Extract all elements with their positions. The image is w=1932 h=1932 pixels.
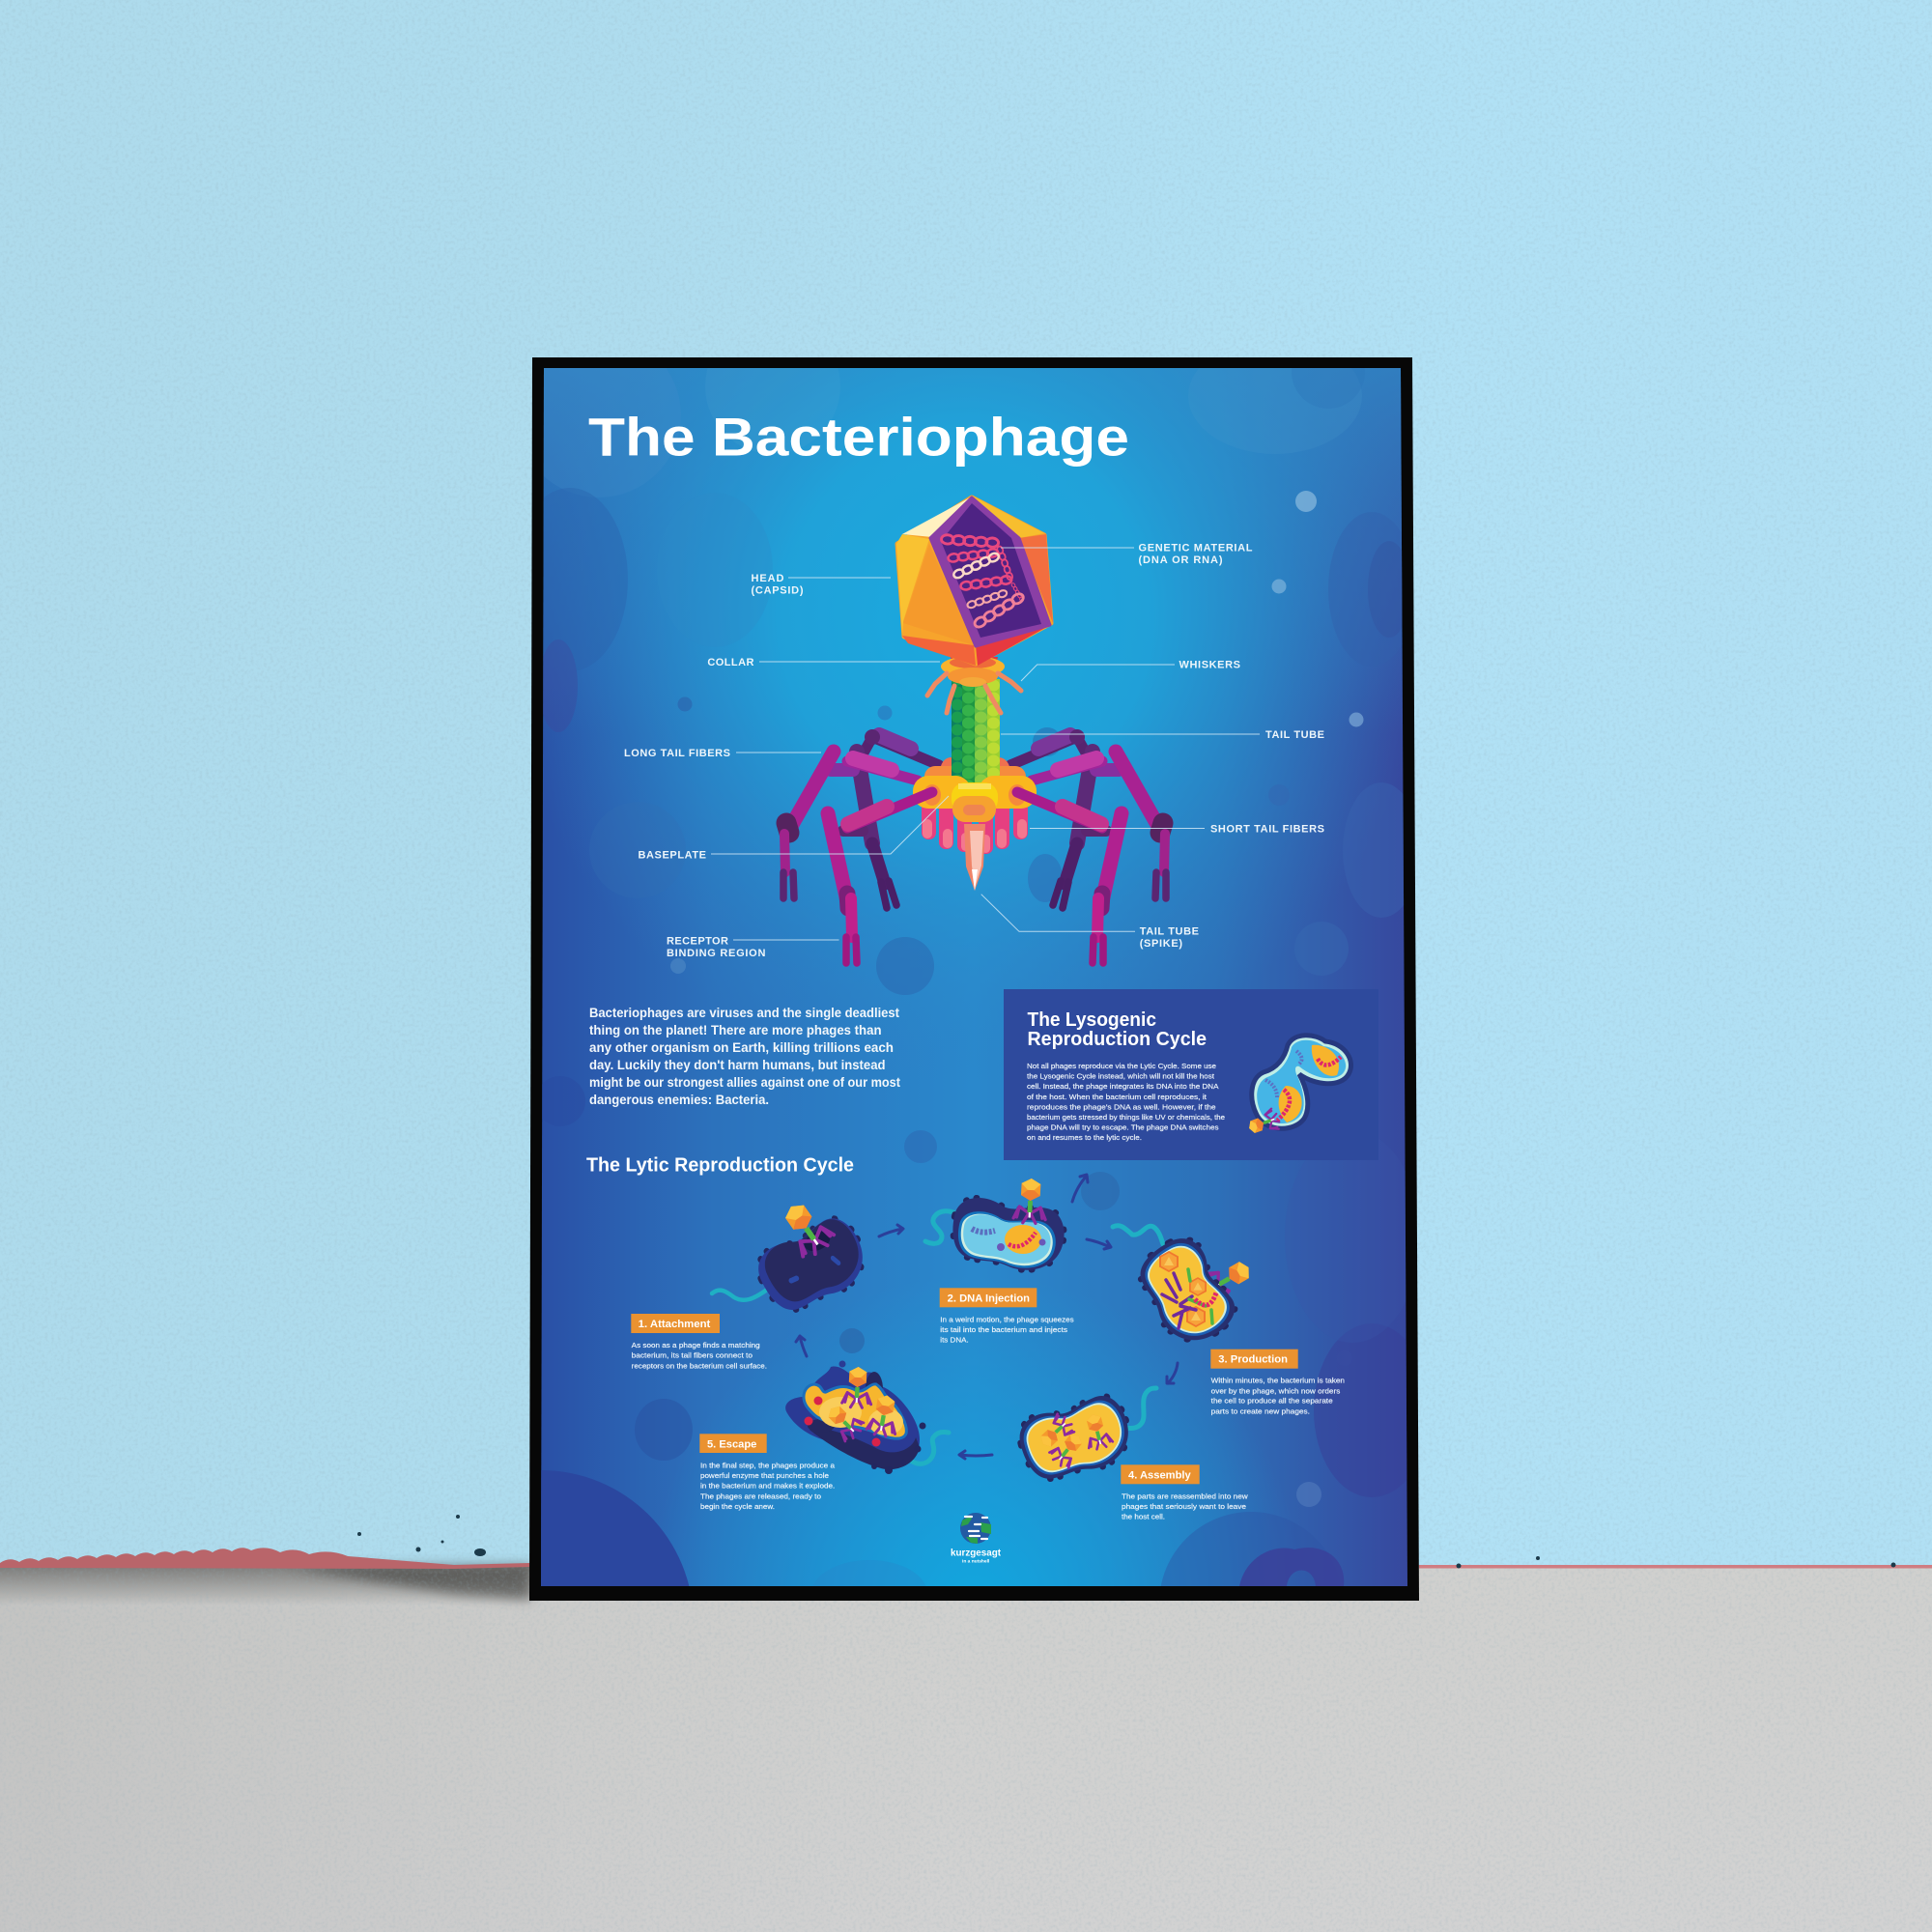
label: short tail fibers: SHORT TAIL FIBERS (1210, 824, 1324, 836)
whiskers (927, 673, 1021, 713)
label: receptor binding region: BINDING REGION (667, 948, 765, 959)
step 5 label: In the final step, the phages produce a (700, 1461, 836, 1469)
label: tail tube: TAIL TUBE (1265, 729, 1324, 741)
back tail fibers (857, 729, 1093, 908)
lysogenic text: of the host. When the bacterium cell reproduces, it (1027, 1093, 1208, 1101)
logo: kurzgesagt (951, 1513, 1001, 1564)
panel: lysogenic cycle (1004, 989, 1378, 1160)
poster background gradient (531, 362, 1420, 1599)
dark cell body (785, 1367, 920, 1468)
cycle arrows (796, 1175, 1178, 1459)
step 4 label: 4. Assembly (1128, 1470, 1191, 1482)
step 5 label: 5. Escape (707, 1438, 756, 1450)
step 2 label: 2. DNA Injection (948, 1293, 1030, 1304)
step 4 assembly illustration (1014, 1388, 1156, 1485)
intro paragraph: might be our strongest allies against one of our most (589, 1075, 901, 1090)
label: whiskers: WHISKERS (1179, 660, 1240, 671)
genetic material window (930, 497, 1050, 646)
step 4 label (1121, 1464, 1248, 1521)
baseplate (913, 776, 1037, 822)
step 3 production illustration (1113, 1226, 1257, 1353)
step 1 label: 1. Attachment (639, 1319, 711, 1330)
label: head capsid: HEAD (752, 573, 784, 584)
step 3 label: Within minutes, the bacterium is taken (1211, 1377, 1345, 1385)
bottom-right purple blob (1239, 1548, 1344, 1586)
lysogenic text (1027, 1062, 1225, 1142)
intro paragraph: thing on the planet! There are more phages than (589, 1023, 881, 1037)
label: head capsid: (CAPSID) (752, 585, 804, 597)
step 2 label: In a weird motion, the phage squeezes (940, 1315, 1074, 1323)
step 1 label (631, 1314, 767, 1370)
intro paragraph (589, 1006, 901, 1107)
label: whiskers (1021, 660, 1240, 681)
step 1 label: receptors on the bacterium cell surface. (632, 1361, 767, 1370)
intro paragraph: any other organism on Earth, killing trillions each (589, 1040, 894, 1055)
lysogenic text: reproduces the phage's DNA as well. However, if the (1027, 1102, 1216, 1111)
lysogenic text: on and resumes to the lytic cycle. (1027, 1133, 1142, 1142)
label: long tail fibers: LONG TAIL FIBERS (624, 748, 730, 759)
lysogenic text: bacterium gets stressed by things like UV or chemicals, the (1027, 1113, 1225, 1122)
step 1 label: As soon as a phage finds a matching (632, 1341, 760, 1350)
lysogenic heading: Reproduction Cycle (1028, 1029, 1207, 1050)
step 5 escape illustration (785, 1360, 949, 1474)
step 4 label: The parts are reassembled into new (1122, 1492, 1248, 1501)
label: genetic material (1001, 543, 1253, 566)
label: receptor binding region: RECEPTOR (667, 935, 728, 947)
step 3 label: 3. Production (1218, 1354, 1288, 1366)
label: genetic material: (DNA OR RNA) (1138, 554, 1223, 566)
label: baseplate: BASEPLATE (638, 850, 706, 862)
step 3 label (1210, 1350, 1345, 1415)
floor (0, 1565, 1932, 1932)
lysogenic text: phage DNA will try to escape. The phage DNA switches (1027, 1123, 1219, 1132)
step 5 label: The phages are released, ready to (700, 1492, 821, 1500)
short tail fibers (922, 797, 1028, 854)
step 2 label: its tail into the bacterium and injects (940, 1325, 1067, 1334)
bottom-left dark blob (541, 1470, 690, 1586)
intro paragraph: dangerous enemies: Bacteria. (589, 1093, 769, 1107)
intro paragraph: Bacteriophages are viruses and the single deadliest (589, 1006, 900, 1020)
label: tail tube spike: TAIL TUBE (1140, 926, 1199, 938)
title: The Bacteriophage (588, 406, 1129, 468)
tail tube (952, 673, 1000, 782)
heading: lytic cycle: The Lytic Reproduction Cycle (586, 1155, 854, 1177)
step 4 label: phages that seriously want to leave (1122, 1502, 1246, 1511)
label: genetic material: GENETIC MATERIAL (1138, 543, 1253, 554)
label: collar: COLLAR (707, 657, 753, 668)
spike (964, 824, 985, 891)
background blobs (542, 438, 1406, 1586)
step 3 label: the cell to produce all the separate (1211, 1397, 1333, 1406)
short front fibers (828, 792, 1122, 963)
lysogenic text: Not all phages reproduce via the Lytic Cycle. Some use (1027, 1062, 1216, 1070)
step 2 label (940, 1288, 1074, 1345)
logo globe (960, 1513, 991, 1544)
step 3 label: over by the phage, which now orders (1211, 1386, 1341, 1395)
step 2 label: its DNA. (940, 1336, 969, 1345)
step 5 label (699, 1434, 836, 1511)
step 2 DNA injection illustration (925, 1178, 1069, 1277)
poster (541, 368, 1407, 1586)
wall specks (357, 1515, 1895, 1569)
baseplate rear (924, 757, 1026, 789)
red paint line at the floor junction (0, 1548, 1932, 1569)
step 1 attachment illustration (712, 1196, 874, 1319)
collar and neck (941, 656, 1005, 687)
logo: kurzgesagt: in a nutshell (962, 1559, 989, 1564)
step 5 label: begin the cycle anew. (700, 1502, 775, 1511)
label: baseplate (638, 796, 949, 862)
step 1 label: bacterium, its tail fibers connect to (632, 1351, 753, 1360)
head capsid (896, 496, 1053, 666)
label: receptor binding region (667, 935, 838, 959)
lysogenic text: the Lysogenic Cycle instead, which will not kill the host (1027, 1072, 1215, 1081)
step 5 label: powerful enzyme that punches a hole (700, 1471, 829, 1480)
poster frame (529, 357, 1419, 1601)
lysogenic heading (1028, 1009, 1207, 1050)
icon: dividing bacterium with prophage (1245, 1036, 1351, 1139)
lysogenic text: cell. Instead, the phage integrates its DNA into the DNA (1027, 1082, 1219, 1091)
step 5 label: in the bacterium and makes it explode. (700, 1482, 835, 1491)
step 3 label: parts to create new phages. (1211, 1406, 1310, 1415)
step 4 label: the host cell. (1122, 1513, 1165, 1521)
label: tail tube spike: (SPIKE) (1140, 938, 1182, 950)
logo: kurzgesagt: kurzgesagt (951, 1548, 1001, 1559)
long tail fibers (783, 752, 1166, 898)
label: head capsid (752, 573, 891, 597)
lysogenic heading: The Lysogenic (1028, 1009, 1156, 1031)
intro paragraph: day. Luckily they don't harm humans, but instead (589, 1058, 885, 1072)
label: tail tube spike (981, 895, 1199, 950)
flagellum (712, 1290, 767, 1300)
phage illustration (783, 496, 1166, 963)
